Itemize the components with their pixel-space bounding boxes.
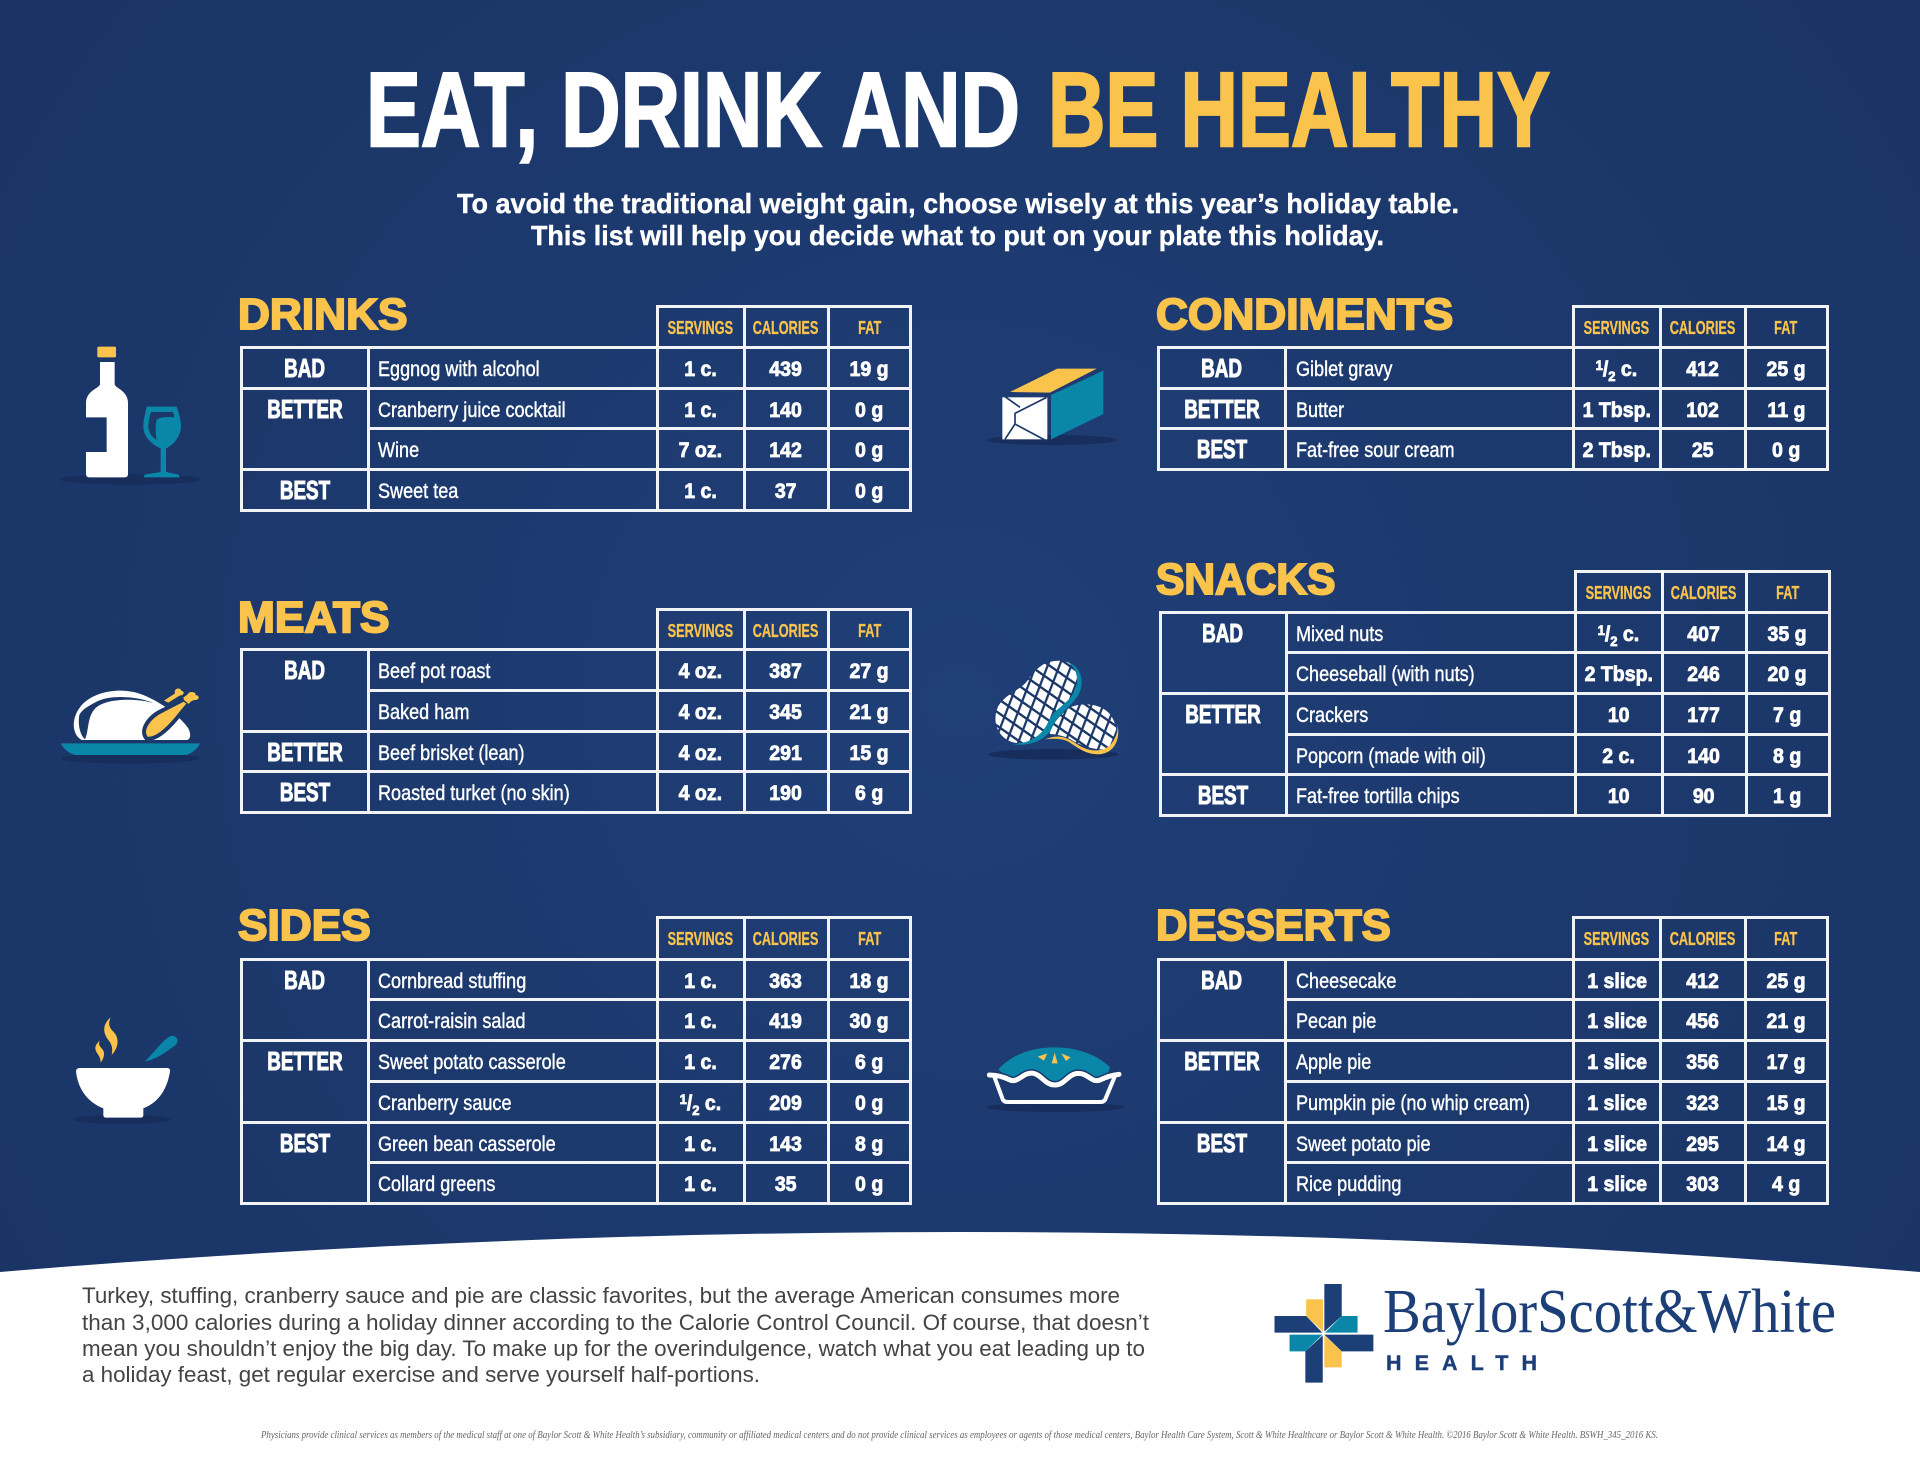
row: bad: 4 oz. xyxy=(679,660,722,682)
row: best xyxy=(280,476,883,504)
row: bad: 25 g xyxy=(1766,358,1806,380)
row: better: BETTER xyxy=(1184,1048,1260,1076)
row: best xyxy=(1197,436,1800,464)
row: best: Roasted turket (no skin) xyxy=(378,782,569,804)
row: bad: 412 xyxy=(1686,970,1719,992)
column headers: FAT xyxy=(1774,928,1798,949)
row: better: 6 g xyxy=(855,1051,883,1074)
column headers xyxy=(267,317,889,504)
row: baked ham: 4 oz. xyxy=(679,700,722,724)
row: best: 4 oz. xyxy=(679,782,722,804)
title: BE HEALTHY xyxy=(1048,51,1550,169)
row: better: Apple pie xyxy=(1296,1050,1371,1074)
row: best: 1 g xyxy=(1773,784,1802,808)
row: best: 190 xyxy=(770,782,802,804)
row: bad: 1 slice xyxy=(1587,970,1647,992)
row: pecan pie: 1 slice xyxy=(1587,1010,1647,1032)
row: rice pudding xyxy=(1158,1162,1827,1203)
row: better: 10 xyxy=(1608,704,1629,726)
subtitle xyxy=(457,188,1459,251)
row: best: 8 g xyxy=(855,1133,883,1156)
row: better: 4 oz. xyxy=(679,742,722,764)
row: collard greens: Collard greens xyxy=(378,1173,495,1196)
row: bad: BAD xyxy=(285,354,325,382)
row: better: 102 xyxy=(1686,398,1719,422)
row: cheeseball: 20 g xyxy=(1768,662,1807,686)
row: bad: 18 g xyxy=(850,970,889,993)
row: better: 1 c. xyxy=(684,398,717,422)
column headers: SERVINGS xyxy=(1586,582,1651,603)
row: pumpkin pie xyxy=(1158,1081,1827,1122)
row: popcorn: 140 xyxy=(1688,744,1720,768)
row: popcorn: Popcorn (made with oil) xyxy=(1296,744,1486,768)
logo cross mark xyxy=(1275,1284,1373,1383)
icon: pie xyxy=(970,1030,1140,1140)
row: bad: BAD xyxy=(1202,966,1242,994)
heading: meats: MEATS xyxy=(238,593,389,642)
row: pecan pie xyxy=(1158,999,1827,1040)
heading: snacks: SNACKS xyxy=(1156,555,1335,604)
row: cranberry sauce xyxy=(378,1091,883,1118)
footer paragraph: Turkey, stuffing, cranberry sauce and pie are classic favorites, but the average American consumes more xyxy=(82,1283,1120,1308)
row: rice pudding: 1 slice xyxy=(1587,1172,1647,1196)
column headers: CALORIES xyxy=(753,620,819,641)
footer paragraph: than 3,000 calories during a holiday dinner according to the Calorie Control Council. Of course, that doesn’t xyxy=(82,1310,1150,1335)
footer paragraph: a holiday feast, get regular exercise and serve yourself half-portions. xyxy=(82,1362,760,1387)
row: better: Sweet potato casserole xyxy=(378,1051,565,1074)
row: pecan pie: Pecan pie xyxy=(1296,1010,1376,1032)
row: rice pudding: Rice pudding xyxy=(1296,1172,1401,1196)
panel: desserts xyxy=(970,900,1840,1210)
row: better: 11 g xyxy=(1767,398,1805,422)
row: bad: 35 g xyxy=(1768,622,1807,646)
column headers: SERVINGS xyxy=(668,317,733,338)
panel: condiments xyxy=(988,290,1829,471)
row: bad: Giblet gravy xyxy=(1296,358,1392,380)
icon: steaming bowl xyxy=(74,1018,178,1124)
row: bad: 1/2 c. xyxy=(1598,622,1639,648)
table: drinks xyxy=(240,305,912,512)
row: best: 143 xyxy=(770,1133,802,1156)
panel: snacks xyxy=(988,555,1831,817)
row: popcorn xyxy=(1160,734,1829,774)
logo: Baylor Scott & White Health xyxy=(1275,1278,1836,1383)
row: better: BETTER xyxy=(1184,396,1260,424)
row: better xyxy=(1185,700,1802,728)
row: baked ham: 21 g xyxy=(850,700,889,724)
row: bad xyxy=(1203,620,1807,648)
row: bad: 25 g xyxy=(1766,970,1806,992)
row: better: 356 xyxy=(1686,1050,1719,1074)
column headers: SERVINGS xyxy=(1584,928,1649,949)
row: better: 1 slice xyxy=(1587,1050,1647,1074)
title: EAT, DRINK AND xyxy=(366,51,1020,169)
icon: roast turkey xyxy=(60,688,200,764)
row: carrot-raisin salad: 30 g xyxy=(850,1010,889,1033)
row: best: BEST xyxy=(280,1130,330,1158)
row: best: 1 c. xyxy=(684,1133,717,1156)
row: cranberry sauce: 0 g xyxy=(855,1092,883,1115)
row: carrot-raisin salad xyxy=(378,1010,889,1033)
row: cheeseball xyxy=(1296,662,1807,686)
column headers xyxy=(1185,582,1807,810)
row: better: 177 xyxy=(1688,704,1720,726)
table: condiments xyxy=(1157,305,1829,471)
row: bad: 412 xyxy=(1686,358,1719,380)
row: best: 10 xyxy=(1608,784,1629,808)
row: better: BETTER xyxy=(267,738,343,766)
panel: meats xyxy=(60,593,912,814)
row: bad: BAD xyxy=(1203,620,1243,648)
row: better: Beef brisket (lean) xyxy=(378,742,524,764)
logo: Baylor Scott & White Health: BaylorScott&White xyxy=(1383,1278,1836,1346)
row: better: 276 xyxy=(770,1051,802,1074)
panel: drinks xyxy=(60,290,912,512)
column headers: SERVINGS xyxy=(1584,317,1649,338)
column headers xyxy=(1158,917,1827,1203)
row: best: 2 Tbsp. xyxy=(1583,438,1651,462)
row: better: 1 c. xyxy=(684,1051,717,1074)
row: better: 15 g xyxy=(850,742,889,764)
row: pecan pie: 21 g xyxy=(1766,1010,1806,1032)
column headers xyxy=(1184,317,1806,464)
column headers: FAT xyxy=(1776,582,1799,603)
row: bad: 19 g xyxy=(850,358,889,380)
row: best xyxy=(280,1130,883,1158)
row: best: 37 xyxy=(775,480,797,502)
row: bad: 439 xyxy=(770,358,802,380)
column headers: CALORIES xyxy=(753,317,819,338)
subtitle: To avoid the traditional weight gain, choose wisely at this year’s holiday table. xyxy=(457,188,1459,219)
row: best: BEST xyxy=(1197,436,1247,464)
row: baked ham: 345 xyxy=(770,700,802,724)
row: bad: 1/2 c. xyxy=(1596,356,1638,384)
row: wine xyxy=(378,438,883,462)
row: cheeseball: 246 xyxy=(1688,662,1720,686)
column headers: CALORIES xyxy=(1670,928,1735,949)
row: better: BETTER xyxy=(267,396,343,424)
row: bad: BAD xyxy=(285,967,325,995)
column headers: SERVINGS xyxy=(668,620,733,641)
row: best: BEST xyxy=(1198,782,1248,810)
row: collard greens xyxy=(378,1173,883,1196)
row: cheeseball: Cheeseball (with nuts) xyxy=(1296,662,1475,686)
row: bad: Beef pot roast xyxy=(378,660,490,682)
row: pumpkin pie: 323 xyxy=(1686,1092,1719,1114)
table: desserts xyxy=(1157,916,1828,1204)
heading: condiments: CONDIMENTS xyxy=(1156,290,1453,339)
row: best: BEST xyxy=(280,476,330,504)
row: pumpkin pie: 1 slice xyxy=(1587,1092,1647,1114)
row: cranberry sauce: Cranberry sauce xyxy=(378,1092,511,1115)
row: better xyxy=(267,396,883,424)
row: best: 295 xyxy=(1686,1132,1719,1156)
table: sides xyxy=(240,916,912,1205)
row: better: 7 g xyxy=(1773,704,1802,726)
row: better xyxy=(1184,396,1805,424)
subtitle: This list will help you decide what to put on your plate this holiday. xyxy=(531,220,1384,251)
row: best: 0 g xyxy=(855,480,883,502)
row: bad: Mixed nuts xyxy=(1296,622,1383,646)
row: best: Fat-free sour cream xyxy=(1296,438,1454,462)
row: better xyxy=(1158,1040,1827,1081)
column headers: FAT xyxy=(858,928,881,949)
fine print disclaimer: Physicians provide clinical services as members of the medical staff at one of Baylor Scott & White Health’s subsidiary, community or affiliated medical centers and do not provide clinical services as employees or agents of those medical centers, Baylor Health Care System, Scott & White Healthcare or Baylor Scott & White Health. ©2016 Baylor Scott & White Health. BSWH_345_2016 KS. xyxy=(260,1430,1658,1441)
column headers: FAT xyxy=(858,620,881,641)
row: best: 14 g xyxy=(1766,1132,1806,1156)
icon: peanuts xyxy=(988,660,1118,760)
row: bad xyxy=(285,656,889,684)
row: bad xyxy=(1158,959,1827,999)
row: cranberry sauce: 1/2 c. xyxy=(680,1091,722,1118)
row: bad xyxy=(1202,354,1806,384)
row: bad: Cheesecake xyxy=(1296,970,1396,992)
logo: Baylor Scott & White Health: HEALTH xyxy=(1386,1351,1537,1375)
row: bad: 363 xyxy=(770,970,802,993)
panel: sides xyxy=(74,901,912,1205)
row: pecan pie: 456 xyxy=(1686,1010,1719,1032)
row: best: BEST xyxy=(280,778,330,806)
row: best: 90 xyxy=(1693,784,1715,808)
row: best: 1 c. xyxy=(684,480,717,502)
row: carrot-raisin salad: Carrot-raisin salad xyxy=(378,1010,525,1033)
row: best: Green bean casserole xyxy=(378,1133,555,1156)
row: best: 1 slice xyxy=(1587,1132,1647,1156)
row: best xyxy=(1160,774,1829,815)
row: bad: Eggnog with alcohol xyxy=(378,358,539,380)
row: bad xyxy=(285,967,889,995)
heading: drinks: DRINKS xyxy=(238,290,408,339)
row: bad: BAD xyxy=(1202,354,1242,382)
row: better: 1 Tbsp. xyxy=(1583,398,1651,422)
row: best xyxy=(1158,1122,1827,1162)
row: popcorn: 2 c. xyxy=(1602,744,1635,768)
row: wine: 142 xyxy=(770,438,802,462)
row: best: 6 g xyxy=(855,782,883,804)
row: bad: 387 xyxy=(770,660,802,682)
row: best: 25 xyxy=(1692,438,1713,462)
row: carrot-raisin salad: 419 xyxy=(770,1010,802,1033)
row: bad: 27 g xyxy=(850,660,889,682)
row: carrot-raisin salad: 1 c. xyxy=(684,1010,717,1033)
column headers: CALORIES xyxy=(753,928,819,949)
row: cheeseball: 2 Tbsp. xyxy=(1584,662,1653,686)
row: bad: Cornbread stuffing xyxy=(378,970,526,993)
column headers: FAT xyxy=(858,317,881,338)
row: best: Sweet potato pie xyxy=(1296,1132,1430,1156)
row: wine: 7 oz. xyxy=(679,438,722,462)
row: rice pudding: 303 xyxy=(1686,1172,1719,1196)
row: rice pudding: 4 g xyxy=(1772,1172,1800,1196)
row: better: Crackers xyxy=(1296,704,1368,726)
column headers: CALORIES xyxy=(1670,317,1735,338)
row: best: BEST xyxy=(1197,1130,1247,1158)
row: collard greens: 0 g xyxy=(855,1173,883,1196)
row: best xyxy=(280,778,883,806)
row: cranberry sauce: 209 xyxy=(770,1092,802,1115)
row: wine: 0 g xyxy=(855,438,883,462)
icon: stick of butter xyxy=(988,368,1116,445)
table: meats xyxy=(240,608,912,814)
row: better: 140 xyxy=(770,398,802,422)
row: bad: BAD xyxy=(285,656,325,684)
row: better: 0 g xyxy=(855,398,883,422)
row: best: Fat-free tortilla chips xyxy=(1296,784,1460,808)
row: wine: Wine xyxy=(378,438,419,462)
heading: desserts: DESSERTS xyxy=(1156,901,1391,950)
icon: wine bottle and glass xyxy=(60,346,200,484)
row: bad: 1 c. xyxy=(684,970,717,993)
footer paragraph xyxy=(82,1283,1150,1387)
row: pumpkin pie: Pumpkin pie (no whip cream) xyxy=(1296,1092,1529,1114)
column headers: CALORIES xyxy=(1671,582,1737,603)
column headers: FAT xyxy=(1774,317,1798,338)
row: bad: 1 c. xyxy=(684,358,717,380)
row: popcorn: 8 g xyxy=(1773,744,1802,768)
footer paragraph: mean you shouldn’t enjoy the big day. To make up for the overindulgence, watch what you eat leading up to xyxy=(82,1336,1145,1361)
row: bad xyxy=(285,354,889,382)
row: baked ham: Baked ham xyxy=(378,700,469,724)
row: better xyxy=(267,738,889,766)
row: better: Butter xyxy=(1296,398,1344,422)
row: better: BETTER xyxy=(267,1048,343,1076)
column headers xyxy=(267,928,889,1196)
row: better: BETTER xyxy=(1185,700,1261,728)
row: better: Cranberry juice cocktail xyxy=(378,398,565,422)
table: snacks xyxy=(1159,570,1831,817)
row: bad: 407 xyxy=(1688,622,1720,646)
row: best: Sweet tea xyxy=(378,480,458,502)
row: baked ham xyxy=(378,700,889,724)
row: better xyxy=(267,1048,883,1076)
row: better: 17 g xyxy=(1766,1050,1806,1074)
column headers xyxy=(267,620,889,806)
heading: sides: SIDES xyxy=(238,901,371,950)
row: best: 0 g xyxy=(1772,438,1800,462)
column headers: SERVINGS xyxy=(668,928,733,949)
row: collard greens: 35 xyxy=(775,1173,797,1196)
row: collard greens: 1 c. xyxy=(684,1173,717,1196)
row: pumpkin pie: 15 g xyxy=(1766,1092,1806,1114)
row: better: 291 xyxy=(770,742,802,764)
